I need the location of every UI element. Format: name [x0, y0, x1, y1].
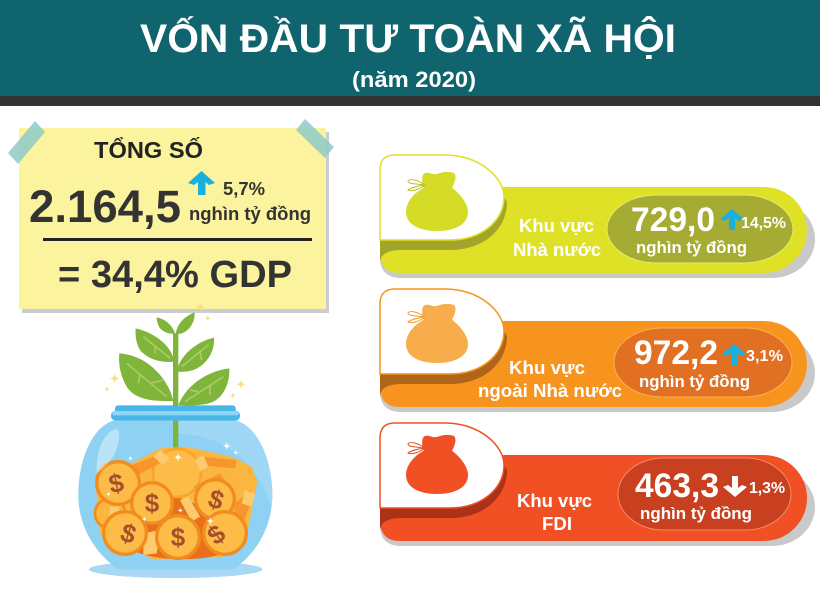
- title: VỐN ĐẦU TƯ TOÀN XÃ HỘI: [140, 15, 676, 61]
- coin pile: $: [171, 522, 186, 552]
- value badge: 1,3%: [749, 480, 785, 497]
- jar highlight: [97, 429, 119, 473]
- value badge: 463,3: [635, 467, 719, 505]
- value badge: nghìn tỷ đồng: [636, 238, 747, 257]
- coin pile: $: [205, 483, 228, 516]
- icon: money bag: [406, 435, 468, 494]
- value badge: [607, 195, 793, 263]
- icon: up arrow: [188, 171, 215, 195]
- icon: money bag: [406, 304, 468, 363]
- coin pile: $: [201, 518, 231, 551]
- jar body: [78, 421, 272, 569]
- value badge: 14,5%: [741, 215, 786, 232]
- plant stem: [173, 333, 178, 448]
- panel: total sticky note: [8, 119, 334, 313]
- icon: money bag: [406, 172, 468, 231]
- sector label: [513, 215, 601, 260]
- panel: state sector: [380, 155, 815, 278]
- sector label: Khu vực: [519, 215, 594, 236]
- sector label: ngoài Nhà nước: [478, 380, 622, 401]
- sector label: Khu vực: [517, 490, 592, 511]
- coin pile: [95, 447, 257, 559]
- value badge: nghìn tỷ đồng: [640, 504, 752, 523]
- coin pile: $: [117, 517, 140, 550]
- coin pile: $: [145, 488, 160, 518]
- value badge: 729,0: [631, 201, 715, 239]
- panel: non-state sector: [380, 289, 815, 412]
- sector label: Khu vực: [509, 357, 585, 378]
- growth rate: 5,7%: [223, 179, 265, 199]
- GDP share: = 34,4% GDP: [58, 254, 292, 296]
- sector label: [478, 357, 622, 401]
- sector label: [517, 490, 592, 534]
- heading: total: TỔNG SỐ: [94, 136, 203, 163]
- value badge: 3,1%: [746, 348, 783, 365]
- leaves: [119, 312, 229, 406]
- panel: FDI sector: [380, 423, 815, 546]
- jar shadow: [89, 561, 262, 578]
- sparkles: [104, 302, 246, 399]
- value badge: [618, 458, 791, 530]
- value badge: nghìn tỷ đồng: [639, 372, 750, 391]
- subtitle: (năm 2020): [352, 67, 476, 92]
- illustration: jar of coins with plant: [78, 302, 272, 578]
- value badge: [614, 328, 792, 397]
- unit: nghìn tỷ đồng: [189, 203, 311, 224]
- sector label: Nhà nước: [513, 239, 601, 260]
- value badge: 972,2: [634, 334, 718, 372]
- header banner: [0, 0, 820, 106]
- jar rim: [111, 405, 240, 421]
- coins: [97, 462, 246, 558]
- sector label: FDI: [542, 513, 572, 534]
- total value: 2.164,5: [29, 181, 181, 232]
- coin pile: $: [106, 467, 127, 499]
